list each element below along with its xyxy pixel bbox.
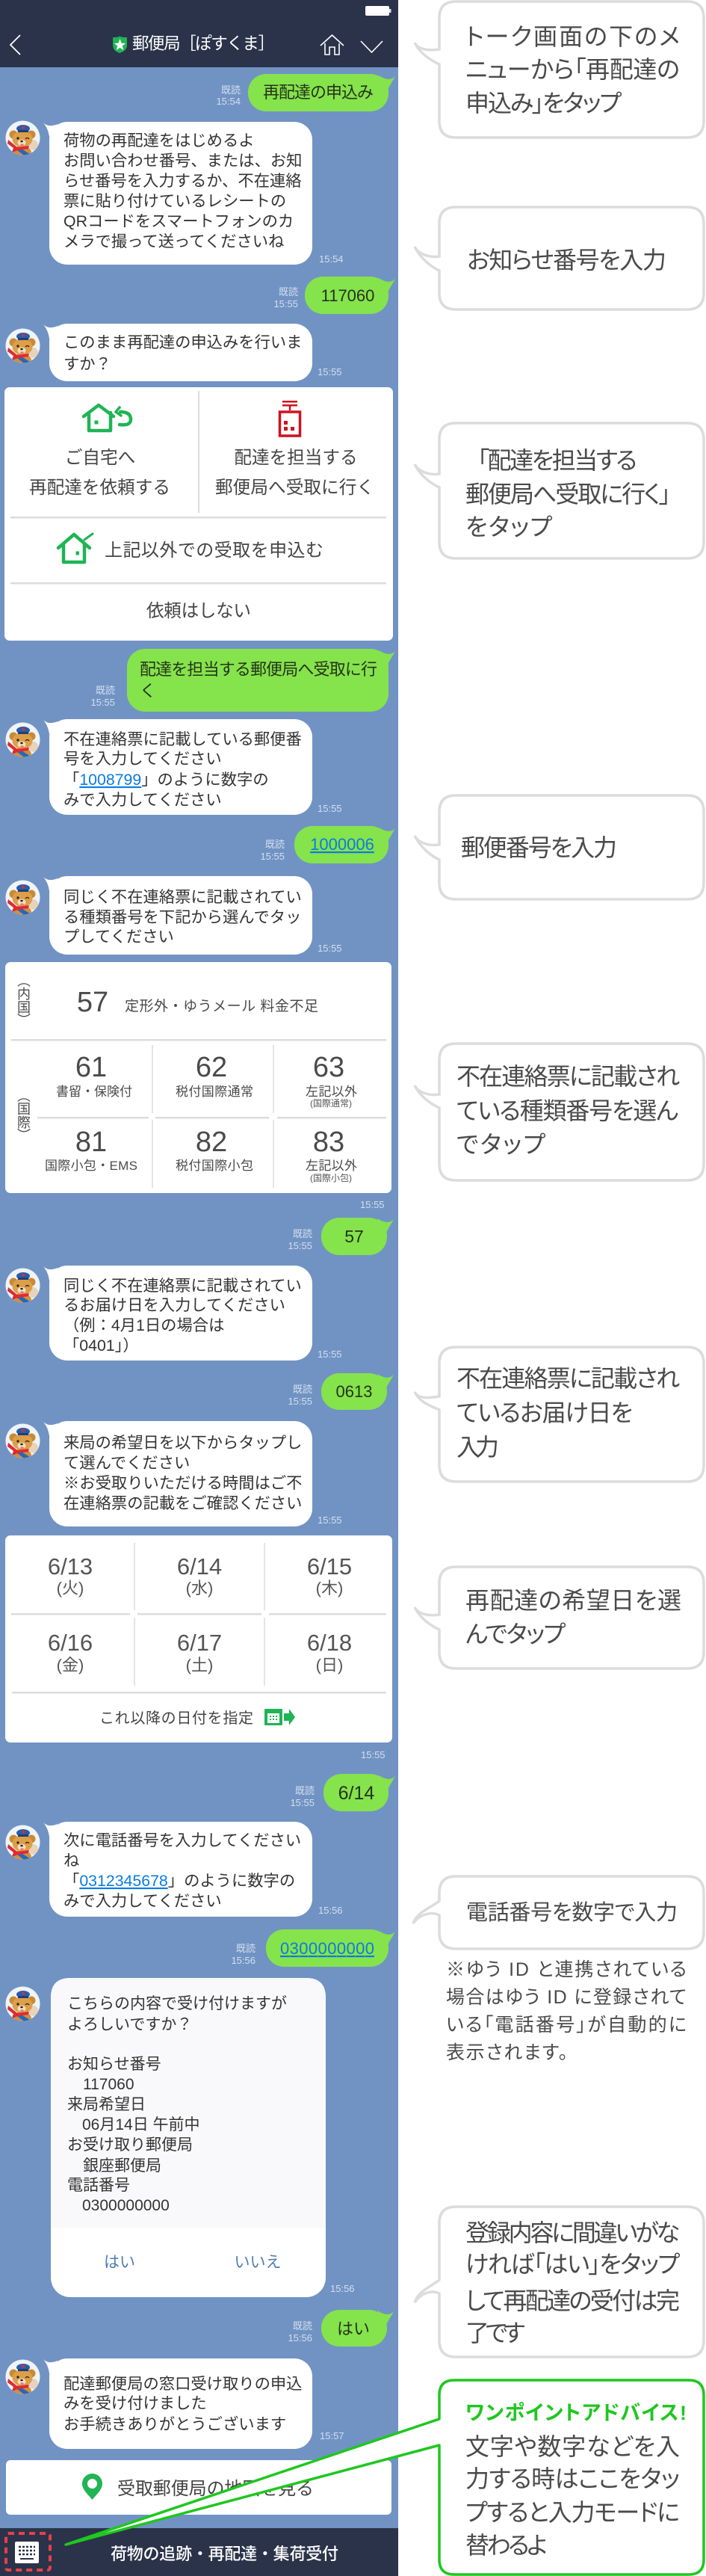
option 63: 左記以外 xyxy=(306,1085,357,1099)
button: yes: はい xyxy=(104,2254,135,2271)
bot bubble: intro: QRコードをスマートフォンのカ xyxy=(64,212,294,230)
callout 7: んでタップ xyxy=(465,1621,566,1648)
bot bubble: postal code request: 不在連絡票に記載している郵便番 xyxy=(64,730,302,748)
text: advice body: 力する時はここをタッ xyxy=(465,2465,680,2492)
date 6/16: (金) xyxy=(57,1656,84,1674)
icon: battery xyxy=(365,6,391,16)
callout 2 xyxy=(415,207,704,309)
date 6/13: (火) xyxy=(57,1579,84,1597)
phone chat background xyxy=(0,0,398,2576)
button: no: いいえ xyxy=(235,2254,281,2271)
user bubble: 1000006: 15:55 xyxy=(260,851,285,862)
date 6/15: (木) xyxy=(316,1579,343,1597)
option 83: 83 xyxy=(313,1127,344,1158)
user bubble: 1000006 xyxy=(260,826,395,863)
user bubble: 0613: 既読 xyxy=(293,1384,312,1395)
user bubble: 再配達の申込み xyxy=(216,74,395,111)
user bubble: 0613: 0613 xyxy=(336,1382,372,1401)
date 6/13: 6/13 xyxy=(48,1553,93,1580)
user bubble: 57: 既読 xyxy=(293,1228,312,1239)
bot bubble: confirm: 15:55 xyxy=(318,366,342,378)
icon: keyboard xyxy=(15,2542,39,2563)
option 62: 税付国際通常 xyxy=(176,1085,253,1099)
timestamp: 15:56 xyxy=(330,2283,355,2294)
heading: advice: ワンポイントアドバイス! xyxy=(465,2402,687,2424)
user bubble: phone number: 0300000000 xyxy=(280,1939,374,1958)
icon: bear avatar xyxy=(5,880,40,919)
user bubble: 117060: 117060 xyxy=(321,286,374,305)
icon: home with return arrow xyxy=(84,405,131,431)
user bubble: はい xyxy=(288,2310,394,2347)
bot bubble: type number request: る種類番号を下記から選んでタッ xyxy=(64,908,301,926)
icon: home xyxy=(321,35,344,55)
icon: verified shield xyxy=(113,36,127,53)
bot bubble: confirmation summary: お受け取り郵便局 xyxy=(67,2136,193,2154)
icon: calendar arrow xyxy=(264,1709,295,1725)
text: other pickup: 上記以外での受取を申込む xyxy=(105,540,323,561)
user bubble: 57: 57 xyxy=(344,1227,364,1246)
bot bubble: intro: 15:54 xyxy=(319,253,344,265)
callout 1 xyxy=(415,1,704,138)
bot bubble: confirmation summary: 06月14日 午前中 xyxy=(82,2116,200,2133)
date 6/18: 6/18 xyxy=(307,1630,352,1656)
user bubble: go to post office: 既読 xyxy=(96,685,115,696)
user bubble: はい: 15:56 xyxy=(288,2332,312,2344)
text: advice body: 替わるよ xyxy=(465,2532,548,2559)
option 82: 82 xyxy=(196,1127,227,1158)
bot bubble: confirmation summary: 来局希望日 xyxy=(67,2096,146,2113)
bot bubble: phone number request: 15:56 xyxy=(318,1905,343,1916)
option 81 xyxy=(45,1127,137,1173)
text: go to post office: 配達を担当する xyxy=(234,448,358,468)
user bubble: go to post office: 配達を担当する郵便局へ受取に行 xyxy=(140,660,377,679)
option 61: 61 xyxy=(75,1052,107,1083)
date 6/18 xyxy=(307,1630,352,1674)
bot bubble: delivery date request: 同じく不在連絡票に記載されてい xyxy=(64,1277,302,1295)
date 6/16 xyxy=(48,1630,93,1674)
icon: bear avatar xyxy=(5,722,40,761)
user bubble: phone number: 15:56 xyxy=(231,1955,256,1966)
user bubble: 117060: 15:55 xyxy=(273,298,298,309)
user bubble: 0613 xyxy=(288,1373,394,1410)
bot bubble: confirmation summary: 0300000000 xyxy=(82,2197,170,2214)
icon: menu chevron xyxy=(361,41,383,52)
text: domestic label: （内国） xyxy=(16,980,31,1020)
bot bubble: confirm: このまま再配達の申込みを行いま xyxy=(64,333,302,351)
bot bubble: intro xyxy=(43,122,344,265)
bot bubble: postal code request: 号を入力してください xyxy=(64,750,222,768)
bot bubble: phone number request: ね xyxy=(64,1852,79,1870)
text: no request: 依頼はしない xyxy=(146,601,251,621)
user bubble: 再配達の申込み: 15:54 xyxy=(216,96,241,107)
bot bubble: delivery date request: るお届け日を入力してください xyxy=(64,1296,285,1314)
callout 9 xyxy=(415,2207,704,2357)
highlight: dashed red frame xyxy=(6,2533,50,2570)
option 63 xyxy=(306,1052,357,1109)
callout 2: お知らせ番号を入力 xyxy=(467,247,666,274)
callout 9: 登録内容に間違いがな xyxy=(465,2219,680,2246)
callout 5: でタップ xyxy=(456,1131,546,1158)
bot bubble: type number request xyxy=(43,876,342,955)
user bubble: go to post office: く xyxy=(140,682,156,700)
note: Yu ID: 表示されます。 xyxy=(446,2042,568,2063)
user bubble: phone number xyxy=(231,1929,395,1967)
bot bubble: desired date request: て選んでください xyxy=(64,1454,190,1472)
date 6/14: (水) xyxy=(186,1579,213,1597)
bot bubble: completion xyxy=(43,2358,344,2449)
bot bubble: desired date request: 15:55 xyxy=(318,1515,342,1526)
callout 5: ている種類番号を選ん xyxy=(456,1097,678,1124)
text: later date: これ以降の日付を指定 xyxy=(99,1710,253,1727)
app header bar xyxy=(0,0,398,67)
icon: bear avatar xyxy=(5,1986,40,2025)
callout 3: 郵便局へ受取に行く」 xyxy=(465,481,671,508)
bot bubble: confirmation summary: 電話番号 xyxy=(67,2177,130,2194)
callout 4: 郵便番号を入力 xyxy=(461,834,617,861)
date 6/16: 6/16 xyxy=(48,1630,93,1656)
date 6/17: 6/17 xyxy=(177,1630,222,1656)
bottom menu bar xyxy=(0,2528,398,2576)
bot bubble: confirm: すか？ xyxy=(64,355,111,373)
bot bubble: postal code request: 「1008799」のように数字の xyxy=(64,771,269,789)
option 83: 左記以外 xyxy=(306,1159,357,1173)
text: advice body: 文字や数字などを入 xyxy=(465,2433,680,2460)
icon: red post box xyxy=(279,401,300,436)
option 62 xyxy=(176,1052,253,1099)
text: home redelivery xyxy=(29,448,170,498)
bot bubble: type number request: プしてください xyxy=(64,928,174,946)
bot bubble: intro: 票に貼り付けているレシートの xyxy=(64,192,286,210)
option 61: 書留・保険付 xyxy=(56,1085,132,1099)
bot bubble: intro: 荷物の再配達をはじめるよ xyxy=(64,132,255,150)
bot bubble: desired date request: ※お受取りいただける時間はご不 xyxy=(64,1474,302,1492)
date 6/18: (日) xyxy=(316,1656,343,1674)
bot bubble: completion: 15:57 xyxy=(320,2430,344,2441)
bot bubble: confirmation summary: 117060 xyxy=(83,2076,134,2093)
callout 5: 不在連絡票に記載され xyxy=(456,1063,680,1090)
callout 6 xyxy=(415,1347,704,1482)
user bubble: 再配達の申込み: 既読 xyxy=(221,84,241,96)
text: home redelivery: ご自宅へ xyxy=(65,448,135,468)
text: menu label: 荷物の追跡・再配達・集荷受付 xyxy=(111,2545,338,2563)
text: advice body xyxy=(465,2433,680,2559)
note: Yu ID: 場合はゆう ID に登録されて xyxy=(446,1987,687,2008)
icon: bear avatar xyxy=(5,328,40,367)
panel: type number card xyxy=(5,962,391,1193)
callout 9: して再配達の受付は完 xyxy=(465,2287,680,2314)
bot bubble: confirmation summary: お知らせ番号 xyxy=(67,2056,161,2073)
date 6/14: 6/14 xyxy=(177,1553,222,1580)
callout 3: をタップ xyxy=(465,514,553,540)
callout 1: ニューから「再配達の xyxy=(465,56,680,83)
user bubble: 0613: 15:55 xyxy=(288,1396,312,1407)
icon: bear avatar xyxy=(5,120,40,159)
callout 7: 再配達の希望日を選 xyxy=(465,1587,681,1614)
option 57: 57 xyxy=(77,987,108,1018)
user bubble: 57 xyxy=(288,1218,394,1255)
bot bubble: delivery date request: （例：4月1日の場合は xyxy=(64,1316,224,1334)
bot bubble: type number request: 同じく不在連絡票に記載されてい xyxy=(64,888,302,906)
user bubble: 1000006: 既読 xyxy=(265,839,285,850)
user bubble: 117060: 既読 xyxy=(279,286,298,298)
callout 8: 電話番号を数字で入力 xyxy=(466,1900,678,1925)
user bubble: 1000006: 1000006 xyxy=(310,835,374,854)
option 62: 62 xyxy=(196,1052,227,1083)
note: Yu ID: ※ゆう ID と連携されている xyxy=(446,1959,687,1980)
user bubble: 6/14 xyxy=(290,1774,395,1811)
option 63: (国際通常) xyxy=(310,1098,352,1109)
option 81: 81 xyxy=(75,1127,107,1158)
callout 6: 不在連絡票に記載され xyxy=(456,1365,680,1392)
user bubble: はい: はい xyxy=(337,2320,370,2338)
option 57: 定形外・ゆうメール 料金不足 xyxy=(125,998,318,1014)
panel: date picker card xyxy=(5,1535,392,1743)
text: go to post office: 郵便局へ受取に行く xyxy=(215,478,374,498)
callout 5 xyxy=(415,1044,704,1180)
callout 6: ているお届け日を xyxy=(456,1399,633,1426)
bot bubble: confirm xyxy=(43,324,342,381)
bot bubble: confirmation summary: こちらの内容で受け付けますが xyxy=(67,1995,287,2012)
user bubble: はい: 既読 xyxy=(293,2320,312,2332)
date 6/15 xyxy=(307,1553,352,1597)
bot bubble: intro: らせ番号を入力するか、不在連絡 xyxy=(64,172,302,190)
bot bubble: confirmation summary: 銀座郵便局 xyxy=(83,2157,161,2175)
user bubble: 6/14: 既読 xyxy=(295,1785,315,1796)
user bubble: 57: 15:55 xyxy=(288,1240,312,1251)
callout 1: 申込み」をタップ xyxy=(465,90,622,117)
option 57 xyxy=(77,987,318,1018)
panel: map button card xyxy=(6,2460,391,2515)
callout 3 xyxy=(415,423,704,558)
bot bubble: delivery date request xyxy=(43,1266,342,1361)
callout 8 xyxy=(413,1876,704,1949)
icon: bear avatar xyxy=(5,2359,40,2398)
option 82 xyxy=(176,1127,253,1173)
option 81: 国際小包・EMS xyxy=(45,1159,137,1173)
text: international label: （国際） xyxy=(16,1095,31,1136)
icon: bear avatar xyxy=(5,1825,40,1864)
bot bubble: delivery date request: 「0401」） xyxy=(64,1337,139,1355)
timestamp: 15:55 xyxy=(360,1199,385,1210)
callout 6: 入力 xyxy=(456,1434,499,1461)
date 6/15: 6/15 xyxy=(307,1553,352,1580)
user bubble: go to post office: 15:55 xyxy=(90,697,115,708)
date 6/17 xyxy=(177,1630,222,1674)
bot bubble: intro: メラで撮って送ってくださいね xyxy=(64,232,284,250)
bot bubble: confirmation summary xyxy=(51,1978,326,2297)
bot bubble: intro: お問い合わせ番号、または、お知 xyxy=(64,152,302,170)
bot bubble: completion: お手続きありがとうございます xyxy=(64,2415,286,2433)
bot bubble: postal code request: みで入力してください xyxy=(64,791,222,809)
user bubble: phone number: 既読 xyxy=(236,1943,256,1954)
user bubble: 6/14: 6/14 xyxy=(338,1783,374,1804)
user bubble: go to post office xyxy=(90,649,395,712)
bot bubble: type number request: 15:55 xyxy=(318,943,342,954)
text: advice body: プすると入力モードに xyxy=(465,2499,680,2526)
bot bubble: delivery date request: 15:55 xyxy=(318,1349,342,1360)
title: account name: 郵便局［ぽすくま］ xyxy=(132,34,275,53)
bot bubble: postal code request: 15:55 xyxy=(318,803,342,814)
option 63: 63 xyxy=(313,1052,344,1083)
date 6/14 xyxy=(177,1553,222,1597)
icon: map pin xyxy=(82,2474,102,2500)
text: home redelivery: 再配達を依頼する xyxy=(29,478,170,498)
bot bubble: desired date request xyxy=(43,1421,342,1526)
callout 1: トーク画面の下のメ xyxy=(465,23,680,50)
icon: bear avatar xyxy=(5,1423,40,1462)
text: go to post office xyxy=(215,448,374,498)
user bubble: 再配達の申込み: 再配達の申込み xyxy=(263,83,374,102)
option 82: 税付国際小包 xyxy=(176,1159,253,1173)
bot bubble: phone number request: みで入力してください xyxy=(64,1892,222,1910)
timestamp: 15:55 xyxy=(361,1749,385,1760)
icon: bear avatar xyxy=(5,1268,40,1307)
option 61 xyxy=(56,1052,132,1099)
bot bubble: postal code request xyxy=(43,719,342,815)
callout 9: 了です xyxy=(465,2320,525,2347)
callout 9: ければ「はい」をタップ xyxy=(465,2251,681,2278)
option 83: (国際小包) xyxy=(310,1172,352,1183)
bot bubble: phone number request xyxy=(43,1822,343,1917)
bot bubble: completion: みを受け付けました xyxy=(64,2394,207,2412)
icon: back chevron xyxy=(10,35,20,55)
date 6/17: (土) xyxy=(186,1656,213,1674)
note: Yu ID xyxy=(446,1959,687,2063)
note: Yu ID: いる「電話番号」が自動的に xyxy=(446,2015,687,2036)
callout 4 xyxy=(415,795,704,899)
bot bubble: confirmation summary: よろしいですか？ xyxy=(67,2016,192,2033)
callout: one point advice xyxy=(66,2380,704,2575)
bot bubble: completion: 配達郵便局の窓口受け取りの申込 xyxy=(64,2375,302,2393)
panel: delivery choice card xyxy=(4,387,393,641)
bot bubble: desired date request: 在連絡票の記載をご確認ください xyxy=(64,1494,302,1512)
callout 3: 「配達を担当する xyxy=(477,447,637,474)
option 83 xyxy=(306,1127,357,1183)
bot bubble: desired date request: 来局の希望日を以下からタップし xyxy=(64,1434,302,1452)
user bubble: 6/14: 15:55 xyxy=(290,1797,315,1808)
callout 7 xyxy=(415,1567,704,1668)
date 6/13 xyxy=(48,1553,93,1597)
bot bubble: phone number request: 次に電話番号を入力してください xyxy=(64,1831,301,1849)
text: view map: 受取郵便局の地図を見る xyxy=(117,2479,314,2499)
bot bubble: phone number request: 「0312345678」のように数字の xyxy=(64,1872,295,1890)
icon: home with up arrow xyxy=(58,534,93,562)
user bubble: 117060 xyxy=(273,277,395,314)
